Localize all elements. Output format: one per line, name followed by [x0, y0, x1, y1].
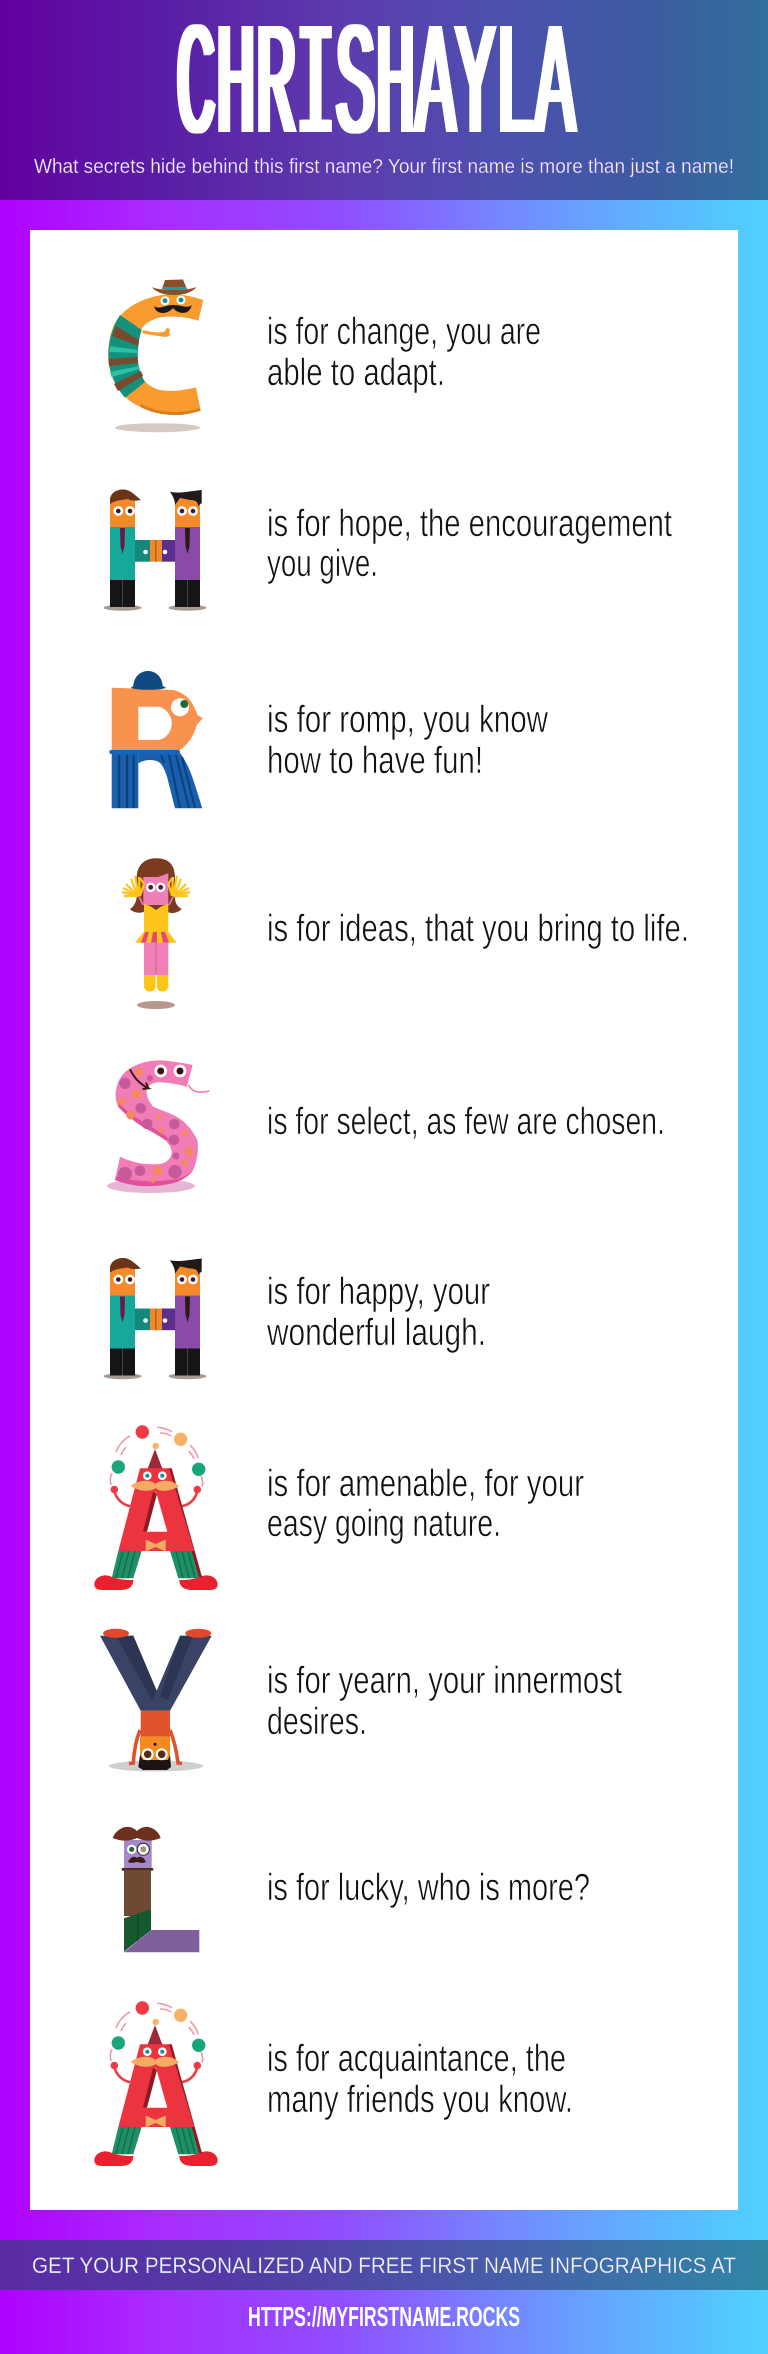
row 3: letter R	[109, 671, 548, 808]
icon: letter A clown character	[94, 1425, 218, 1590]
icon: letter A clown character	[94, 2001, 218, 2166]
title: CHRISHAYLA	[176, 0, 575, 181]
text: A: easy going nature.	[267, 1503, 501, 1545]
icon: letter H character	[104, 489, 206, 611]
row 8: letter Y	[100, 1629, 622, 1772]
row 7: letter A	[94, 1425, 584, 1590]
row 10: letter A	[94, 2001, 573, 2166]
subtitle: What secrets hide behind this first name? Your first name is more than just a name!	[34, 156, 734, 178]
icon: letter R character	[109, 671, 203, 808]
text: A: is for acquaintance, the	[267, 2038, 566, 2080]
text: C: able to adapt.	[267, 352, 445, 394]
text: Y	[267, 1660, 622, 1743]
footer url: HTTPS://MYFIRSTNAME.ROCKS	[248, 2301, 520, 2332]
text: A	[267, 2038, 573, 2121]
text: H: is for happy, your	[267, 1271, 490, 1313]
row 5: letter S	[107, 1060, 665, 1193]
row 1: letter C	[108, 280, 541, 432]
text: H: you give.	[267, 543, 378, 585]
text: A	[267, 1463, 584, 1545]
text: H: wonderful laugh.	[266, 1312, 486, 1354]
footer call to action: GET YOUR PERSONALIZED AND FREE FIRST NAME INFOGRAPHICS AT	[32, 2253, 736, 2278]
header band	[0, 0, 768, 200]
icon: letter Y upside down character	[100, 1629, 212, 1772]
text: R: is for romp, you know	[267, 699, 548, 741]
text: A: many friends you know.	[267, 2079, 573, 2121]
white content panel	[30, 230, 738, 2210]
icon: letter I character	[122, 858, 190, 1009]
text: H	[266, 1271, 490, 1354]
text: R: how to have fun!	[267, 740, 483, 782]
text: R	[267, 699, 548, 782]
row 4: letter I	[122, 858, 689, 1009]
text: C	[267, 311, 541, 394]
row 2: letter H	[104, 489, 672, 611]
text: Y: is for yearn, your innermost	[267, 1660, 622, 1702]
row 9: letter L	[113, 1827, 590, 1952]
text: L: is for lucky, who is more?	[267, 1867, 590, 1909]
text: Y: desires.	[267, 1701, 367, 1743]
text: A: is for amenable, for your	[267, 1463, 584, 1505]
icon: letter L character	[113, 1827, 199, 1952]
icon: letter S character	[107, 1060, 209, 1193]
row 6: letter H	[104, 1258, 490, 1379]
icon: letter C character	[108, 280, 203, 432]
text: H	[267, 503, 672, 585]
text: C: is for change, you are	[267, 311, 541, 353]
icon: letter H character	[104, 1258, 206, 1379]
footer band	[0, 2240, 768, 2290]
